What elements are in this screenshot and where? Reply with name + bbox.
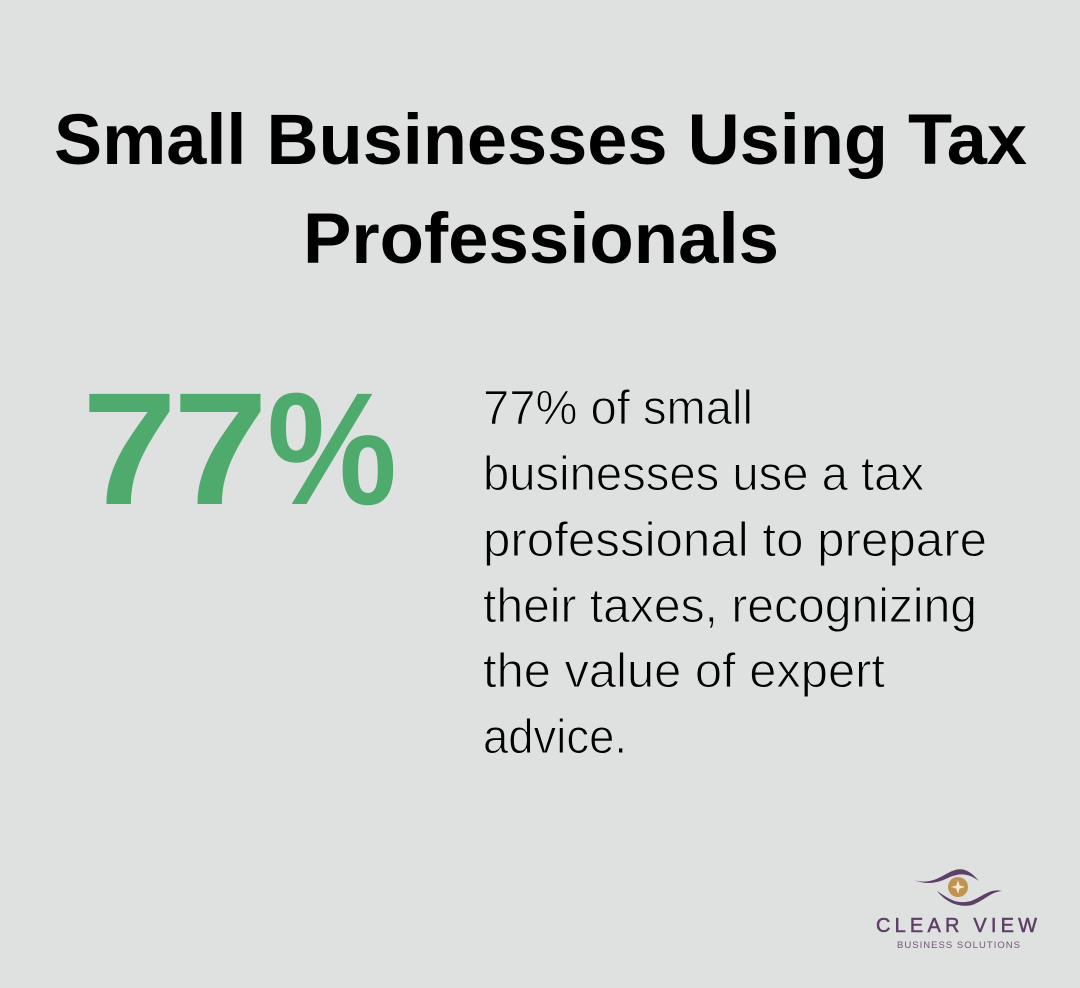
description text: advice. (483, 711, 627, 764)
big statistic: 77% (82, 359, 397, 538)
big statistic: 77%: 7 (173, 359, 268, 538)
big statistic: 77%: % (267, 359, 397, 538)
logo wordmark: CLEAR VIEW (876, 915, 1037, 937)
description text: their taxes, recognizing (483, 580, 977, 633)
description text: businesses use a tax (483, 448, 924, 501)
logo tagline: BUSINESS SOLUTIONS (897, 940, 1020, 951)
description text: the value of expert (483, 645, 885, 698)
big statistic: 77%: 7 (82, 359, 177, 538)
icon: eye (914, 869, 1002, 906)
title: Small Businesses Using Tax (54, 101, 1027, 180)
description text (483, 382, 987, 764)
logo: Clear View Business Solutions (876, 869, 1037, 951)
title: Professionals (303, 200, 779, 279)
title (54, 101, 1027, 279)
description text: 77% of small (483, 382, 753, 435)
description text: professional to prepare (483, 514, 987, 567)
